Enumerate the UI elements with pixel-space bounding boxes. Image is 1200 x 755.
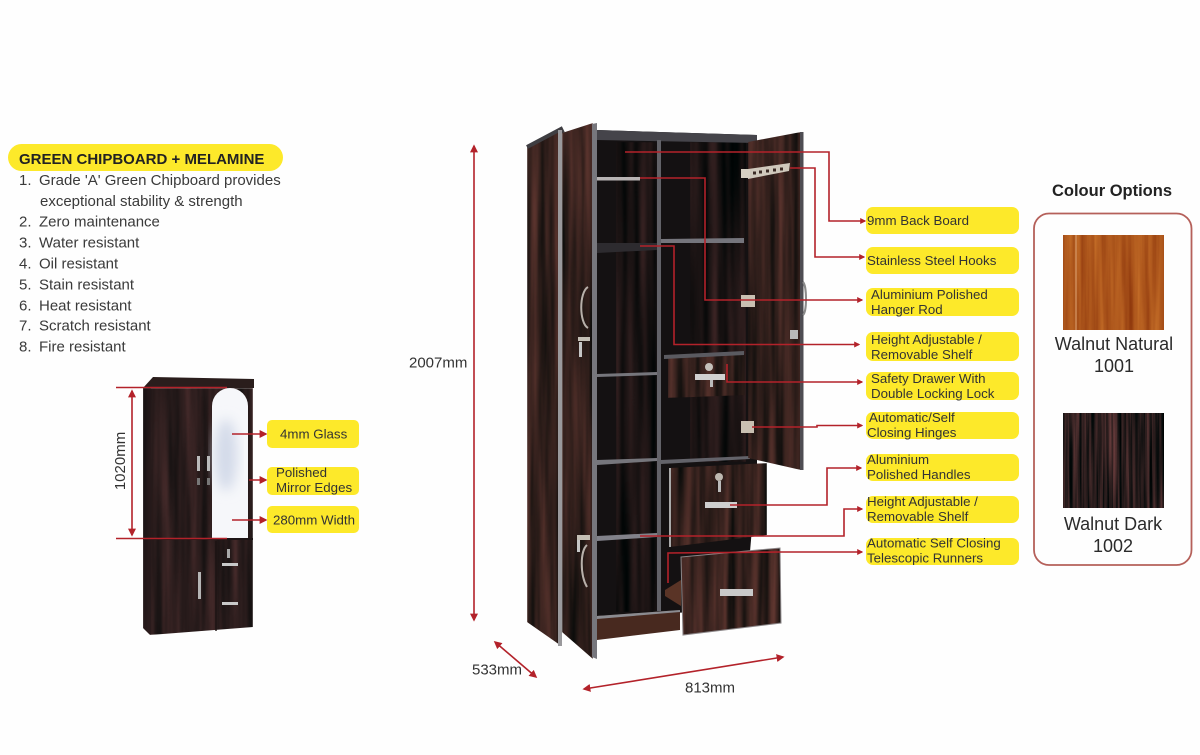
dimension: 1020mm height [112, 388, 227, 538]
feature list: Zero maintenance [39, 214, 160, 230]
feature list: 2. [19, 214, 32, 230]
callout: height adjustable shelf upper: Height Adjustable / [871, 332, 982, 347]
heading: green chipboard + melamine: GREEN CHIPBOARD + MELAMINE [19, 151, 264, 168]
callout: closing hinges: Automatic/Self [869, 410, 955, 425]
feature list: Water resistant [39, 234, 140, 252]
middle drawer [669, 463, 767, 547]
feature list: exceptional stability & strength [40, 193, 243, 210]
callout: polished mirror edges: Mirror Edges [276, 480, 352, 495]
feature list: 1. [19, 172, 32, 189]
feature list: 6. [19, 298, 32, 314]
telescopic runner [665, 580, 681, 606]
dimension: 813mm width: 813mm [685, 680, 735, 696]
callout: aluminium polished hanger rod: Hanger Rod [871, 302, 943, 317]
callout: polished handles [730, 452, 1019, 505]
hook rail [741, 163, 790, 179]
callout: 9mm back board [625, 152, 1019, 234]
dimension: 2007mm height: 2007mm [409, 354, 467, 372]
callout: closing hinges [752, 410, 1019, 440]
lower open drawer [681, 548, 781, 635]
hinge lower [741, 421, 754, 433]
callout: 280mm width [232, 506, 359, 533]
swatch: walnut natural [1055, 235, 1173, 376]
callout: height adjustable shelf upper: Removable Shelf [871, 347, 973, 362]
right door [748, 132, 806, 470]
dimension: 1020mm height: 1020mm [112, 432, 129, 490]
safety drawer [664, 351, 745, 398]
feature list: 4. [19, 256, 32, 272]
swatch: walnut dark: 1002 [1093, 536, 1133, 556]
callout: polished handles: Polished Handles [867, 467, 971, 482]
panel: colour options [1034, 214, 1192, 565]
heading: colour options: Colour Options [1052, 182, 1172, 200]
swatch: walnut dark [1063, 413, 1164, 556]
callout: polished mirror edges: Polished [276, 465, 327, 480]
callout: closing hinges: Closing Hinges [867, 425, 957, 440]
feature list: 8. [19, 338, 32, 356]
callout: height adjustable shelf lower: Height Adjustable / [867, 494, 978, 509]
dimension: 533mm depth: 533mm [472, 662, 522, 678]
callout: stainless steel hooks [790, 168, 1019, 274]
feature list: Stain resistant [39, 276, 135, 294]
panel: material features [8, 144, 283, 356]
callout: 4mm glass [232, 420, 359, 448]
callout: safety drawer: Double Locking Lock [871, 386, 995, 401]
illustration: dressing cabinet with mirror [143, 377, 254, 635]
callout: safety drawer [727, 364, 1019, 401]
left door [562, 123, 597, 659]
callout: aluminium polished hanger rod: Aluminium Polished [871, 287, 988, 302]
heading: green chipboard + melamine [8, 144, 283, 171]
callout: height adjustable shelf lower [640, 494, 1019, 536]
callout: height adjustable shelf lower: Removable Shelf [867, 509, 969, 524]
feature list: 5. [19, 276, 32, 294]
side panel front edge [558, 130, 562, 646]
feature list: 7. [19, 318, 32, 334]
swatch: walnut dark: Walnut Dark [1064, 514, 1163, 534]
feature list: 3. [19, 234, 32, 252]
side panel top and edge [527, 129, 563, 147]
callout: 280mm width: 280mm Width [273, 512, 355, 528]
dimension: 533mm depth [472, 642, 536, 678]
callout: aluminium polished hanger rod [640, 178, 1019, 317]
callout: safety drawer: Safety Drawer With [871, 371, 986, 386]
callout: polished handles: Aluminium [867, 452, 929, 467]
callout: 9mm back board: 9mm Back Board [867, 213, 969, 228]
left side panel [527, 128, 560, 645]
hinge upper [741, 295, 755, 307]
callout: telescopic runners [668, 536, 1019, 583]
feature list: Fire resistant [39, 338, 127, 356]
feature list: Oil resistant [39, 256, 119, 272]
callout: 4mm glass: 4mm Glass [280, 426, 348, 442]
illustration: main wardrobe [527, 123, 806, 659]
callout: telescopic runners: Automatic Self Closing [867, 536, 1001, 550]
swatch: walnut natural: 1001 [1094, 356, 1134, 376]
feature list: Scratch resistant [39, 318, 152, 334]
callout: telescopic runners: Telescopic Runners [867, 550, 983, 566]
dimension: 813mm width [584, 657, 783, 696]
callout: height adjustable shelf upper [640, 246, 1019, 362]
feature list: Heat resistant [39, 298, 132, 314]
feature list: Grade 'A' Green Chipboard provides [39, 172, 281, 189]
callout: polished mirror edges [249, 465, 359, 495]
cabinet interior [597, 130, 757, 640]
feature list [19, 172, 281, 356]
swatch: walnut natural: Walnut Natural [1055, 334, 1173, 354]
callout: stainless steel hooks: Stainless Steel Hooks [867, 253, 997, 268]
